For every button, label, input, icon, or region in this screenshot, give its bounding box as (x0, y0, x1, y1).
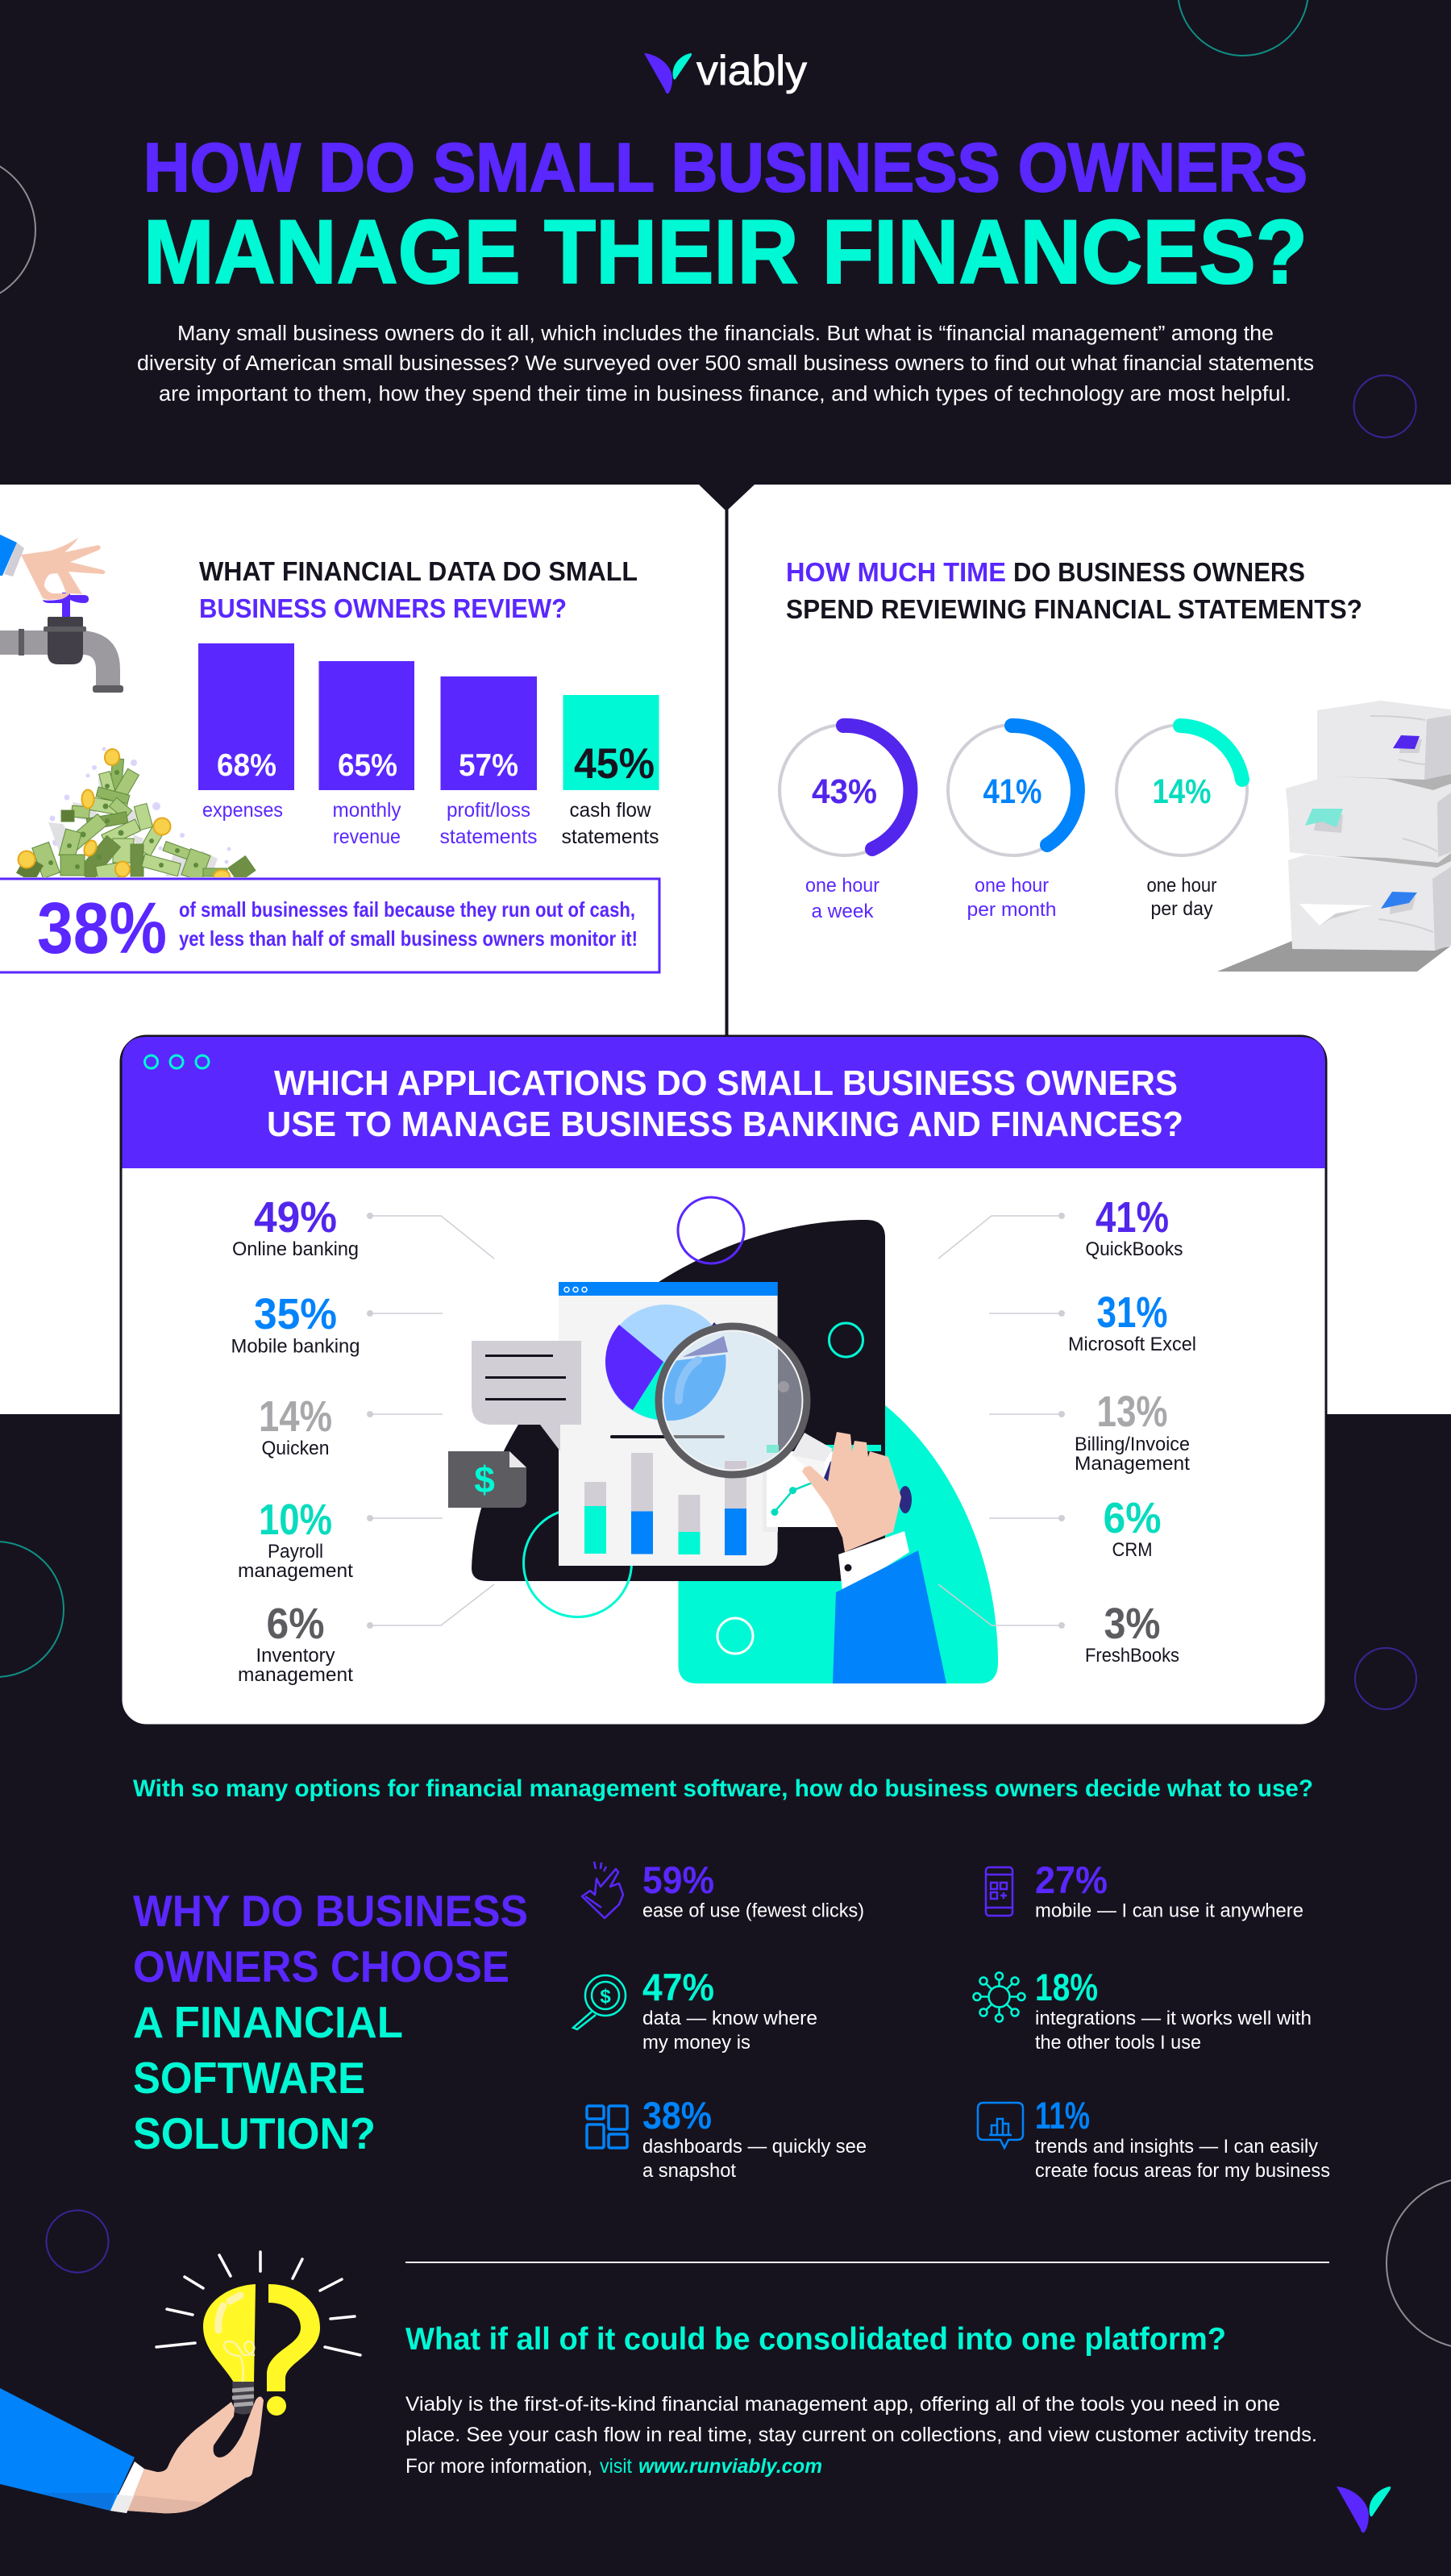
heading: why choose software: SOLUTION? (133, 2108, 376, 2158)
text: viably description (405, 2393, 1317, 2478)
illustration: pile of money (17, 747, 256, 883)
stats: left applications: Inventory (256, 1645, 335, 1667)
icon: magnifier with dollar (573, 1975, 626, 2029)
stats: right applications: CRM (1112, 1539, 1153, 1561)
intro text (137, 323, 1314, 406)
logo mark: footer (1337, 2487, 1391, 2532)
illustration: hand holding lightbulb question mark (0, 2252, 360, 2513)
callout: 38% run out of cash: 38% (37, 888, 167, 969)
illustration: stacks of paper (1217, 701, 1451, 972)
stats: left applications: 35% (254, 1290, 337, 1338)
stat: 47% data: 47% (642, 1966, 714, 2008)
hand and sleeve (127, 2396, 264, 2513)
stats: left applications: Online banking (232, 1238, 359, 1260)
question mark (267, 2284, 320, 2391)
stats: right applications: Microsoft Excel (1068, 1334, 1196, 1355)
callout: 38% run out of cash: of small businesses fail because they run out of cash, (179, 897, 635, 922)
stats: right applications: 3% (1104, 1600, 1161, 1648)
stats: right applications: 6% (1103, 1494, 1161, 1542)
stats: right applications: FreshBooks (1085, 1645, 1179, 1667)
text: software question: With so many options for financial management software, how do business owners decide what to use? (133, 1775, 1313, 1802)
icon: network nodes (974, 1972, 1025, 2022)
icon: dashboard tiles (587, 2106, 627, 2148)
bulb half (203, 2284, 256, 2382)
stats: right applications: Management (1075, 1453, 1190, 1475)
invoice with dollar sign: $ (474, 1459, 495, 1500)
connector lines (367, 1213, 1065, 1629)
illustration: hand turning faucet (0, 535, 123, 693)
donut: 43% one hour a week: one hour (805, 875, 879, 897)
stat: 47% data (573, 1966, 817, 2054)
callout: 38% run out of cash (0, 879, 659, 972)
logo: viably: viably (696, 48, 807, 94)
donut: 41% one hour per month: per month (967, 899, 1056, 921)
bar chart: financial data: 45% (574, 740, 655, 788)
callout: 38% run out of cash: yet less than half of small business owners monitor it! (179, 926, 638, 951)
stats: left applications: 10% (259, 1496, 332, 1544)
donut: 14% one hour per day: per day (1151, 898, 1212, 920)
stat: 27% mobile: mobile — I can use it anywhere (1035, 1900, 1303, 1922)
stat: 59% ease of use: 59% (642, 1858, 714, 1901)
header panel (137, 48, 1314, 406)
illustration: financial dashboard under magnifier (448, 1197, 998, 1683)
stat: 38% dashboards (587, 2094, 867, 2182)
title (143, 130, 1308, 302)
intro text: diversity of American small businesses? We surveyed over 500 small business owners to find out what financial statements (137, 352, 1314, 375)
heading: why choose software: WHY DO BUSINESS (133, 1886, 528, 1936)
light rays (156, 2252, 360, 2355)
stats: left applications: Quicken (261, 1438, 329, 1459)
heading: why choose software: SOFTWARE (133, 2053, 365, 2103)
donut: 14% one hour per day: one hour (1146, 875, 1217, 897)
intro text: Many small business owners do it all, which includes the financials. But what is “financial management” among the (177, 323, 1274, 345)
stat: 27% mobile: 27% (1035, 1858, 1108, 1901)
heading: why choose software: A FINANCIAL (133, 1997, 403, 2047)
bar chart: financial data: profit/loss (447, 799, 530, 822)
stat: 18% integrations: the other tools I use (1035, 2032, 1201, 2054)
stats: left applications: Mobile banking (231, 1335, 360, 1358)
panel: financial data review (0, 535, 659, 972)
heading: consolidated platform: What if all of it could be consolidated into one platform? (405, 2322, 1226, 2357)
stat: 59% ease of use (582, 1858, 864, 1922)
donut: 14% one hour per day: 14% (1153, 772, 1211, 811)
donut: 41% one hour per month: 41% (983, 772, 1041, 811)
panel: applications card (121, 1036, 1326, 1725)
icon: clicking hand (582, 1862, 623, 1918)
stat: 18% integrations: integrations — it works well with (1035, 2008, 1312, 2029)
logo: viably (644, 48, 807, 94)
bar chart: financial data: monthly (332, 799, 401, 822)
stats: right applications: QuickBooks (1085, 1238, 1183, 1260)
stats: right applications: Billing/Invoice (1075, 1434, 1190, 1455)
heading: time spent: HOW MUCH TIME (786, 557, 1006, 587)
bar chart: financial data: revenue (333, 826, 401, 848)
stats: left applications: 14% (259, 1392, 332, 1441)
icon: chat with chart (978, 2103, 1023, 2148)
text: viably description: www.runviably.com (638, 2455, 822, 2478)
stats: right applications: 13% (1096, 1388, 1167, 1436)
stat: 11% trends: create focus areas for my business (1035, 2160, 1330, 2182)
bar chart: financial data: 57% (459, 748, 518, 783)
donut: 43% one hour a week (780, 725, 910, 922)
stats: right applications: 41% (1096, 1193, 1169, 1242)
stats: left applications: management (238, 1560, 353, 1582)
decorative circles: lower section (0, 1542, 1416, 1709)
stats: left applications: 6% (266, 1600, 324, 1648)
title: MANAGE THEIR FINANCES? (143, 202, 1308, 302)
invoice with dollar sign (448, 1451, 526, 1508)
hand holding magnifier (802, 1432, 946, 1683)
stat: 11% trends (978, 2094, 1330, 2182)
heading: time spent (786, 557, 1362, 624)
heading: financial data: BUSINESS OWNERS REVIEW? (199, 593, 567, 623)
card header (123, 1037, 1325, 1168)
stats: left applications: 49% (254, 1193, 337, 1242)
stats: right applications (1068, 1193, 1196, 1667)
title: HOW DO SMALL BUSINESS OWNERS (143, 130, 1308, 206)
stats: right applications: 31% (1096, 1288, 1167, 1337)
panel: time spent reviewing (780, 557, 1451, 972)
bar chart: financial data (198, 643, 659, 848)
bar chart: financial data: 65% (338, 748, 397, 783)
stat: 59% ease of use: ease of use (fewest clicks) (642, 1900, 864, 1922)
stats: left applications: management (238, 1664, 353, 1686)
heading: time spent: SPEND REVIEWING FINANCIAL STATEMENTS? (786, 594, 1362, 624)
bar chart: financial data: expenses (202, 799, 283, 822)
heading: why choose software (133, 1886, 528, 2158)
heading: time spent: DO BUSINESS OWNERS (1013, 557, 1305, 587)
stat: 27% mobile (986, 1858, 1303, 1922)
bar chart: financial data: cash flow (569, 799, 651, 822)
stat: 38% dashboards: a snapshot (642, 2160, 736, 2182)
panel: consolidated platform call to action (405, 2262, 1329, 2478)
panel: white survey section background (0, 485, 1451, 1414)
bar chart: financial data: statements (561, 826, 659, 848)
heading: financial data (199, 556, 638, 623)
text: viably description: place. See your cash flow in real time, stay current on collections, and view customer activity trends. (405, 2424, 1317, 2446)
stat: 11% trends: 11% (1035, 2094, 1090, 2137)
stat: 47% data: data — know where (642, 2008, 817, 2029)
stat: 18% integrations: 18% (1035, 1966, 1098, 2008)
donut: 43% one hour a week: a week (811, 901, 875, 922)
chart sheet (763, 1433, 881, 1532)
card header: WHICH APPLICATIONS DO SMALL BUSINESS OWNERS (274, 1063, 1178, 1103)
stats: left applications: Payroll (268, 1541, 323, 1563)
bar chart: financial data: 68% (217, 748, 276, 783)
stat: 38% dashboards: 38% (642, 2094, 712, 2137)
bar chart: financial data: statements (440, 826, 537, 848)
section divider with pointer (699, 485, 755, 1041)
stat: 11% trends: trends and insights — I can easily (1035, 2136, 1318, 2158)
stats: left applications (231, 1193, 360, 1686)
icon: mobile phone (986, 1867, 1012, 1916)
donut: 41% one hour per month (948, 725, 1079, 921)
speech bubble (472, 1341, 581, 1451)
magnifier (655, 1322, 818, 1485)
heading: why choose software: OWNERS CHOOSE (133, 1941, 509, 1991)
stat: 18% integrations (974, 1966, 1312, 2054)
decorative circles: header (0, 0, 1416, 437)
text: viably description: Viably is the first-of-its-kind financial management app, offering all of the tools you need in one (405, 2393, 1280, 2416)
decorative circles: footer (47, 2178, 1451, 2349)
text: viably description: visit (600, 2455, 632, 2478)
donut: 43% one hour a week: 43% (812, 772, 877, 811)
stat: 38% dashboards: dashboards — quickly see (642, 2136, 867, 2158)
icon: magnifier with dollar: $ (600, 1986, 611, 2008)
donut: 41% one hour per month: one hour (975, 875, 1049, 897)
text: viably description: For more information, (405, 2455, 592, 2478)
stat: 47% data: my money is (642, 2032, 750, 2054)
heading: financial data: WHAT FINANCIAL DATA DO SMALL (199, 556, 638, 586)
intro text: are important to them, how they spend their time in business finance, and which types of technology are most helpful. (159, 383, 1291, 406)
donut: 14% one hour per day (1116, 725, 1247, 920)
card header: USE TO MANAGE BUSINESS BANKING AND FINANCES? (267, 1105, 1183, 1144)
